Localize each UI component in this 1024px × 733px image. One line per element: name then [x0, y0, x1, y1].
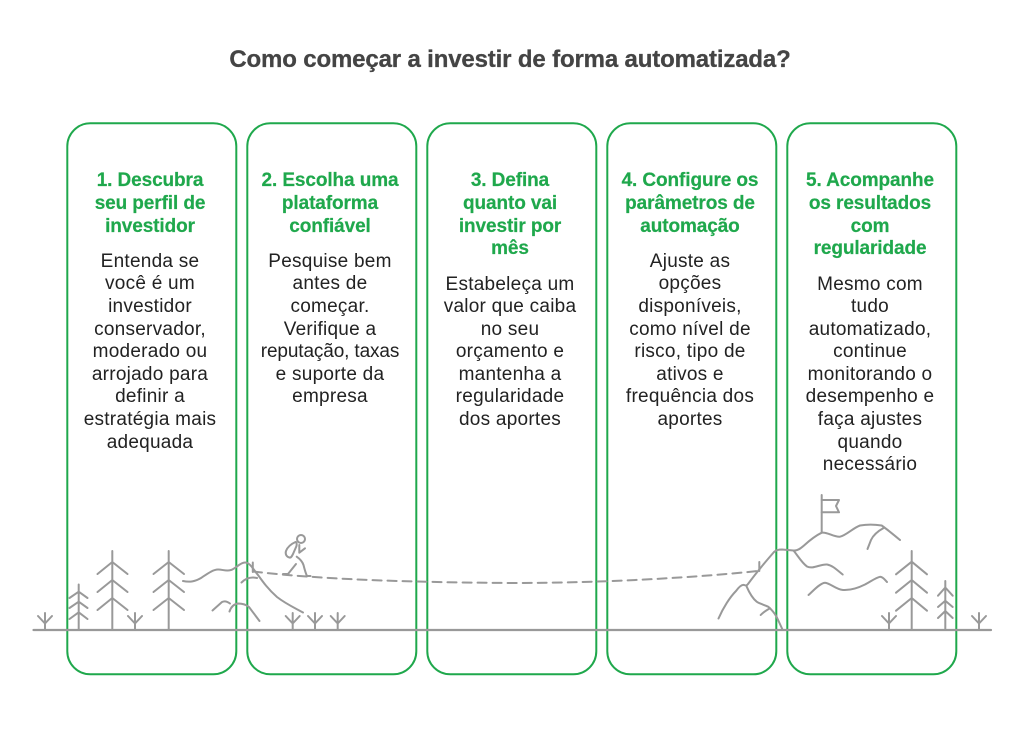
text: step 5: automatizado,: [809, 319, 931, 340]
text: step 4: risco, tipo de: [634, 341, 746, 362]
text: step 1: Entenda se: [101, 251, 199, 272]
heading: step 5: regularidade: [814, 238, 926, 259]
icon: small tree left: [70, 584, 88, 630]
text: step 1: você é um: [105, 273, 195, 294]
heading: step 1: investidor: [105, 216, 195, 237]
icon: small tree right: [938, 581, 953, 630]
text: step 2: Verifique a: [284, 319, 376, 340]
panel: step 3: [426, 122, 598, 676]
heading: step 1: 1. Descubra: [97, 170, 203, 191]
heading: step 2: plataforma: [282, 193, 378, 214]
icon: grass sprouts left: [38, 613, 345, 630]
text: step 5: faça ajustes: [818, 409, 922, 430]
heading: step 5: 5. Acompanhe: [806, 170, 934, 191]
heading: step 3: investir por: [459, 216, 561, 237]
text: step 5: [806, 274, 934, 475]
heading: step 3: [459, 170, 562, 259]
text: step 3: Estabeleça um: [446, 274, 574, 294]
text: step 3: mantenha a: [459, 364, 561, 385]
text: step 1: estratégia mais: [84, 409, 216, 430]
icon: tall tree left 1: [98, 551, 128, 630]
icon: hiker: [283, 535, 310, 576]
text: step 1: conservador,: [94, 319, 206, 340]
text: step 4: disponíveis,: [638, 296, 742, 317]
text: step 5: quando: [838, 432, 902, 453]
panel: step 1: [66, 122, 238, 676]
heading: step 5: os resultados: [809, 193, 931, 214]
text: step 2: Pesquise bem: [268, 251, 392, 272]
heading: step 4: [622, 170, 758, 237]
title: Como começar a investir de forma automatizada?: [229, 46, 791, 73]
heading: step 2: confiável: [289, 216, 371, 237]
text: step 4: Ajuste as: [650, 251, 730, 272]
text: step 5: necessário: [823, 454, 917, 475]
text: step 3: dos aportes: [459, 409, 561, 430]
text: step 1: definir a: [115, 386, 185, 407]
heading: step 1: [95, 170, 205, 237]
text: step 4: ativos e: [656, 364, 724, 385]
icon: mountain right: [718, 525, 900, 630]
heading: step 4: automação: [640, 216, 740, 237]
panel: step 5: [786, 122, 958, 676]
ground line: [34, 629, 991, 631]
text: step 2: reputação, taxas: [261, 341, 399, 362]
text: step 5: desempenho e: [806, 386, 934, 407]
text: step 1: [84, 251, 216, 453]
text: step 5: continue: [833, 341, 907, 362]
heading: step 3: quanto vai: [463, 193, 557, 214]
heading: step 1: seu perfil de: [95, 193, 205, 214]
text: step 2: antes de: [293, 273, 367, 294]
text: step 5: Mesmo com: [817, 274, 923, 294]
heading: step 2: 2. Escolha uma: [262, 170, 398, 191]
text: step 1: investidor: [108, 296, 192, 317]
heading: step 2: [262, 170, 399, 237]
text: step 3: [444, 274, 576, 430]
text: step 1: arrojado para: [92, 364, 208, 385]
text: step 1: adequada: [107, 432, 193, 453]
text: step 3: orçamento e: [456, 341, 564, 362]
text: step 4: como nível de: [629, 319, 751, 340]
text: step 2: e suporte da: [276, 364, 384, 385]
panel: step 2: [246, 122, 418, 676]
heading: step 3: mês: [491, 238, 529, 259]
heading: step 4: 4. Configure os: [622, 170, 758, 191]
text: step 2: começar.: [290, 296, 370, 317]
text: step 5: monitorando o: [808, 364, 932, 385]
text: step 3: no seu: [481, 319, 539, 340]
icon: tall tree left 2: [154, 551, 184, 630]
text: step 4: frequência dos: [626, 386, 754, 407]
text: step 4: opções: [659, 273, 721, 294]
heading: step 5: com: [851, 216, 889, 237]
icon: grass sprouts right: [882, 613, 986, 630]
text: step 2: [261, 251, 399, 407]
heading: step 5: [806, 170, 934, 259]
text: step 4: [626, 251, 754, 430]
heading: step 4: parâmetros de: [625, 193, 755, 214]
icon: summit flag: [822, 495, 839, 533]
dashed trail: [253, 571, 758, 583]
icon: tall tree right: [896, 551, 927, 630]
text: step 2: empresa: [292, 386, 368, 407]
text: step 1: moderado ou: [93, 341, 207, 362]
icon: hill left: [183, 562, 303, 621]
text: step 4: aportes: [657, 409, 723, 430]
text: step 3: regularidade: [456, 386, 564, 407]
text: step 3: valor que caiba: [444, 296, 576, 317]
panel: step 4: [606, 122, 778, 676]
heading: step 3: 3. Defina: [471, 170, 549, 191]
text: step 5: tudo: [851, 296, 889, 317]
